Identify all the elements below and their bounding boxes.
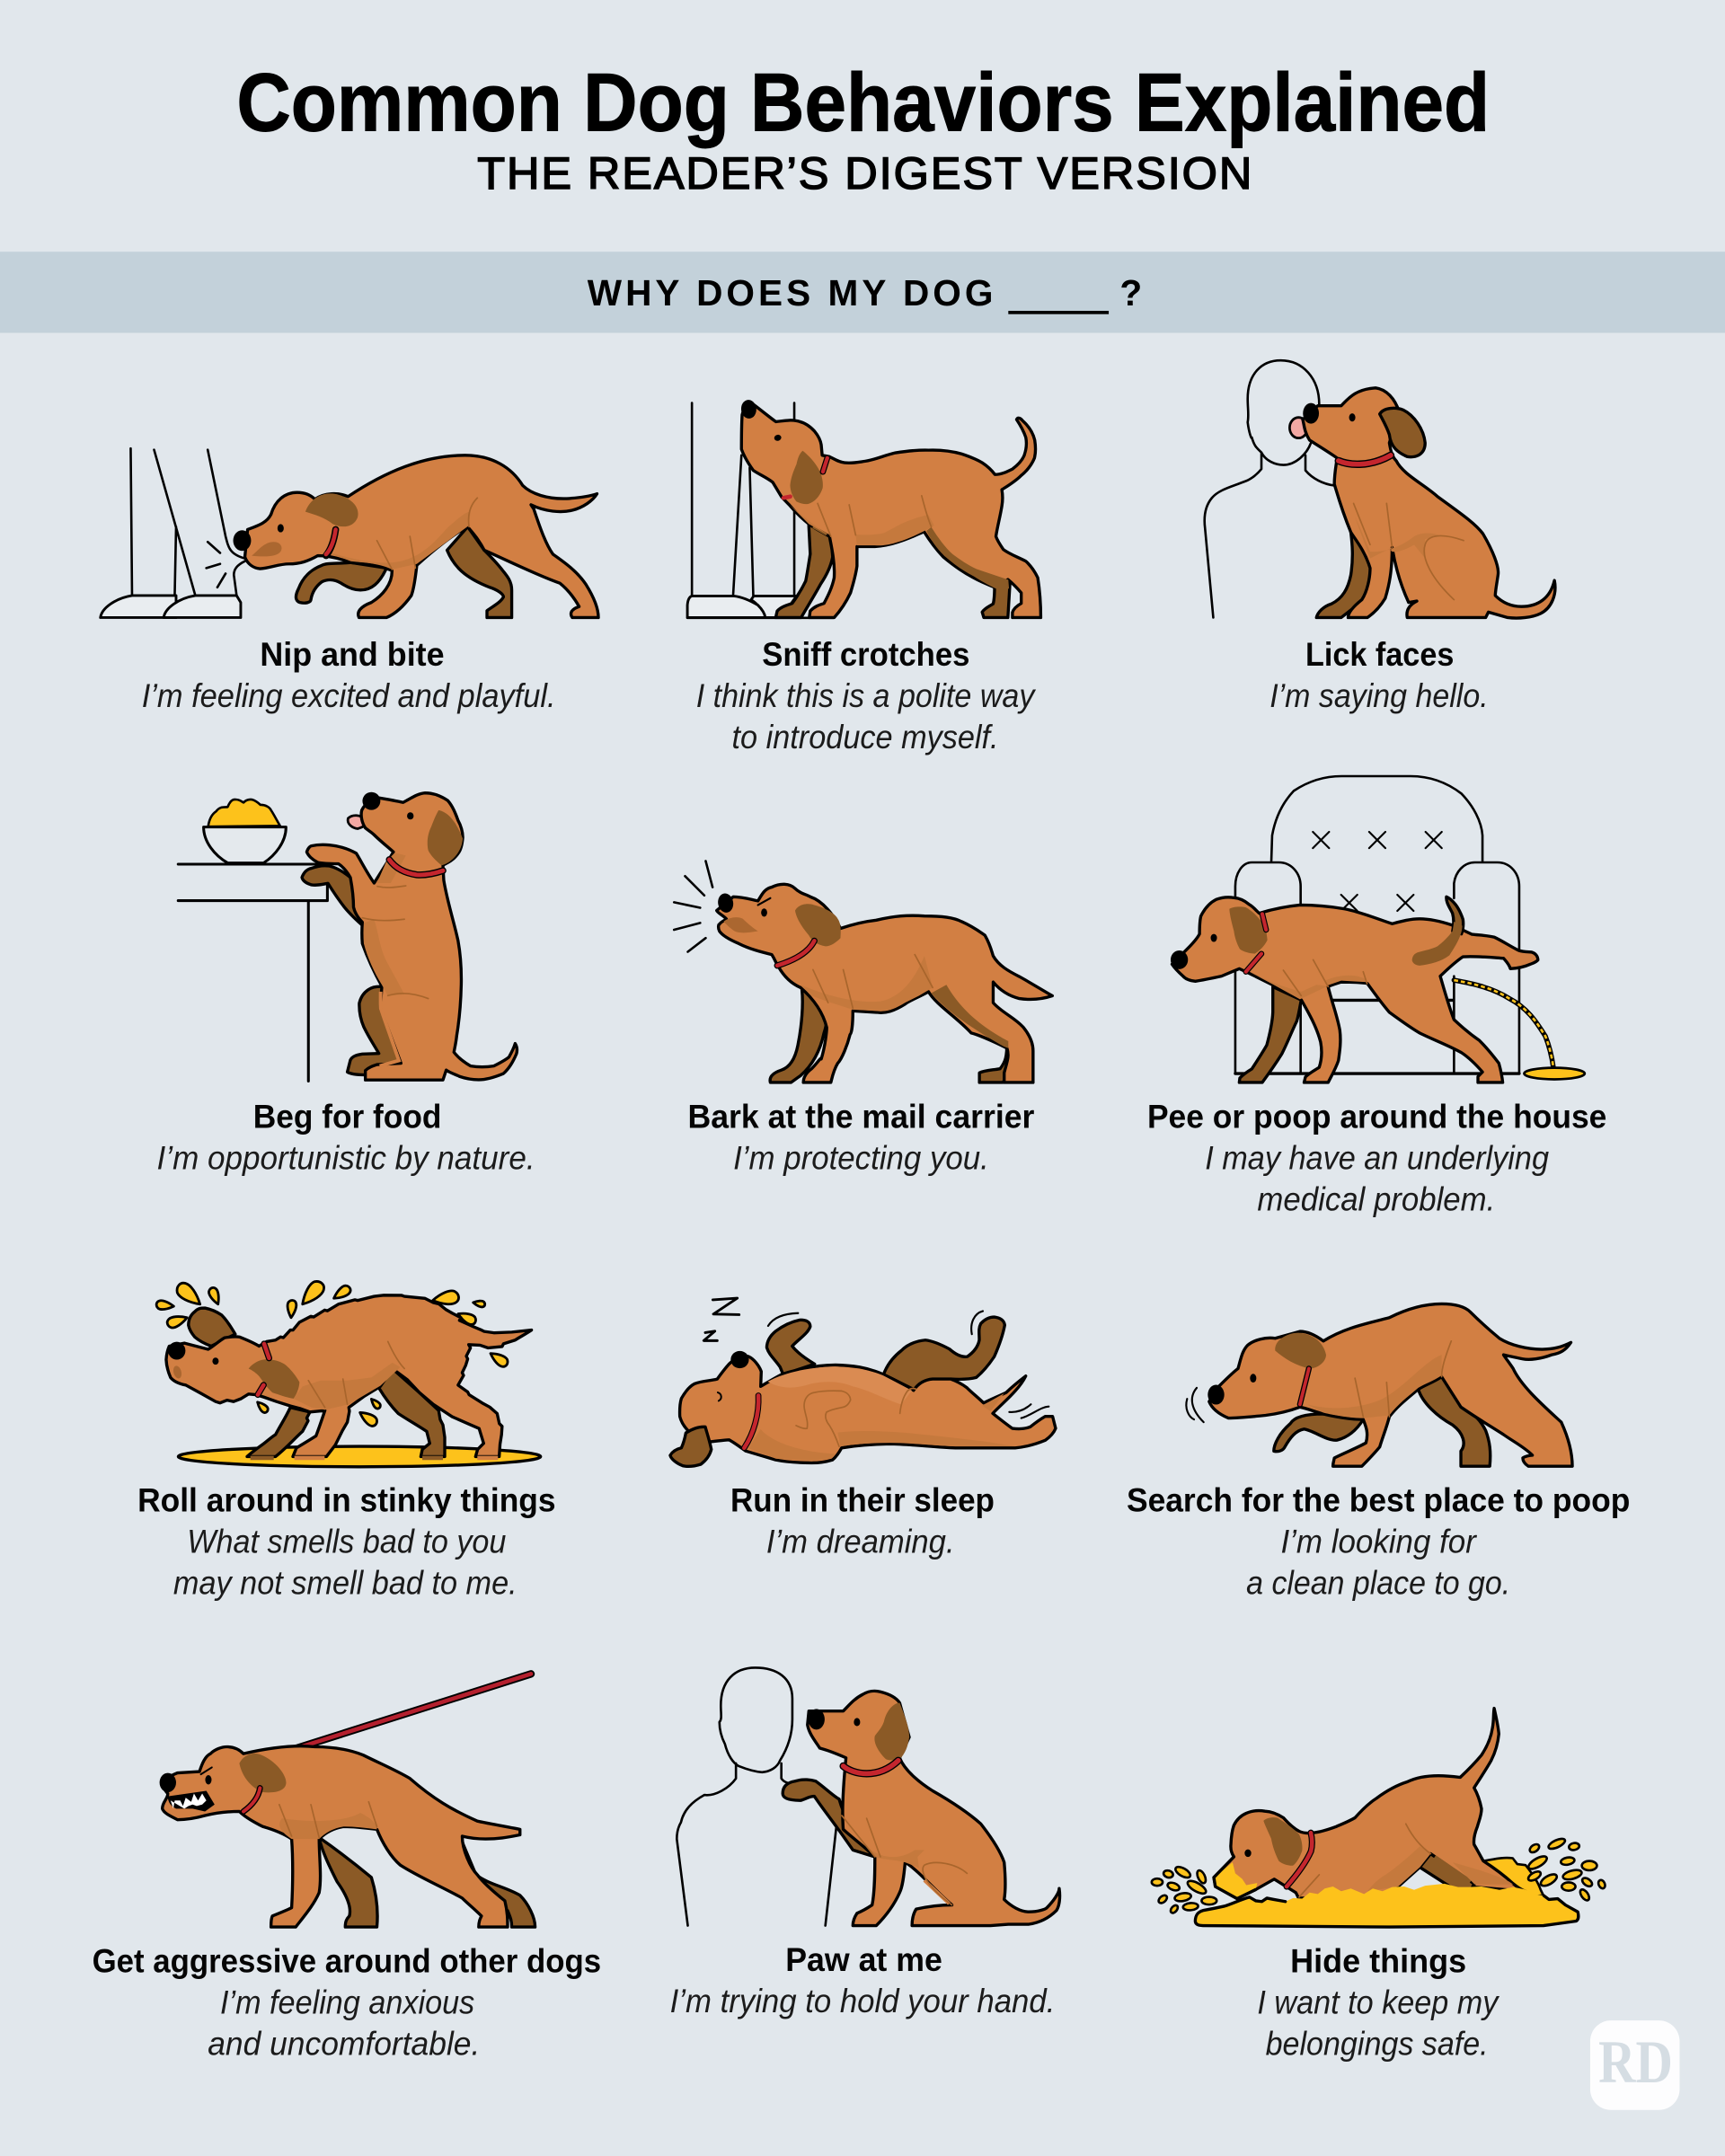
description: I’m opportunistic by nature. <box>157 1138 535 1176</box>
heading: Nip and bite <box>260 635 445 673</box>
heading: Run in their sleep <box>730 1481 995 1519</box>
pee stream <box>1454 980 1585 1079</box>
armchair <box>1235 776 1519 1074</box>
subtitle: THE READER’S DIGEST VERSION <box>477 147 1252 199</box>
description line 2: belongings safe. <box>1266 2024 1489 2062</box>
panel: get aggressive around other dogs <box>93 1674 601 2062</box>
description: I’m saying hello. <box>1269 676 1489 714</box>
dirt pile back <box>1483 1858 1544 1898</box>
panel: lick faces <box>1205 360 1555 714</box>
illustration: dog peeing on an armchair <box>1171 776 1585 1082</box>
panel: nip and bite <box>101 448 598 714</box>
panel: run in their sleep <box>670 1298 1056 1560</box>
panel: hide things <box>1152 1709 1606 2062</box>
heading: Pee or poop around the house <box>1147 1098 1606 1135</box>
illustration: dog sleeping on its back <box>670 1298 1056 1466</box>
heading: Hide things <box>1290 1942 1466 1980</box>
heading: Bark at the mail carrier <box>688 1098 1035 1135</box>
heading: Roll around in stinky things <box>137 1481 556 1519</box>
description: What smells bad to you <box>187 1523 507 1560</box>
dirt pile front <box>1195 1884 1579 1927</box>
panel: bark at the mail carrier <box>674 861 1052 1176</box>
illustration: dog nipping at a person's leg <box>101 448 598 617</box>
description: I think this is a polite way <box>696 676 1036 714</box>
illustration: dog sniffing the ground <box>1186 1303 1572 1466</box>
heading: Search for the best place to poop <box>1127 1481 1630 1519</box>
sleeping Z letters <box>703 1298 739 1340</box>
panel: beg for food <box>157 792 535 1176</box>
heading: Lick faces <box>1305 635 1454 673</box>
description: I’m trying to hold your hand. <box>670 1982 1055 2019</box>
snarling mouth <box>168 1790 215 1811</box>
splash drops <box>156 1278 509 1428</box>
description: I may have an underlying <box>1205 1138 1549 1176</box>
logo: RD badge: RD <box>1598 2028 1673 2096</box>
description line 2: and uncomfortable. <box>208 2024 480 2062</box>
logo: RD badge <box>1590 2020 1679 2110</box>
leash <box>275 1674 531 1755</box>
section band: why does my dog: WHY DOES MY DOG <box>588 272 993 314</box>
description: I’m protecting you. <box>733 1138 989 1176</box>
illustration: dog licking a person's face <box>1205 360 1555 618</box>
illustration: dog digging in yellow mound <box>1152 1709 1606 1927</box>
dirt on the muzzle <box>1214 1862 1257 1899</box>
illustration: snarling dog on a leash <box>160 1674 535 1927</box>
illustration: dog pawing at a person <box>677 1667 1060 1926</box>
tail <box>1446 897 1464 934</box>
motion lines <box>768 1311 1048 1418</box>
flying dirt pellets <box>1152 1837 1606 1914</box>
heading: Beg for food <box>253 1098 441 1135</box>
description: I want to keep my <box>1257 1984 1499 2021</box>
description: I’m dreaming. <box>766 1523 955 1560</box>
panel: paw at me <box>670 1667 1060 2019</box>
description: I’m looking for <box>1280 1523 1477 1560</box>
title: Common Dog Behaviors Explained <box>236 57 1490 148</box>
description line 2: a clean place to go. <box>1246 1564 1510 1602</box>
heading: Paw at me <box>785 1940 942 1978</box>
description line 2: to introduce myself. <box>732 718 999 755</box>
section band: why does my dog <box>0 252 1725 333</box>
heading: Get aggressive around other dogs <box>93 1942 601 1980</box>
illustration: dog sniffing a person's crotch <box>687 399 1040 618</box>
panel: pee or poop around the house <box>1147 776 1606 1217</box>
description line 2: medical problem. <box>1257 1180 1495 1217</box>
panel: roll around in stinky things <box>137 1278 556 1602</box>
description: I’m feeling excited and playful. <box>142 676 556 714</box>
illustration: dog barking <box>674 861 1052 1082</box>
heading: Sniff crotches <box>762 635 969 673</box>
illustration: shaggy dog on a yellow puddle <box>156 1278 541 1467</box>
description line 2: may not smell bad to me. <box>173 1564 518 1602</box>
description: I’m feeling anxious <box>220 1984 474 2021</box>
illustration: dog begging at a table <box>178 792 517 1081</box>
section band: why does my dog: ? <box>1119 272 1142 314</box>
panel: search for the best place to poop <box>1127 1303 1630 1602</box>
panel: sniff crotches <box>687 399 1040 755</box>
